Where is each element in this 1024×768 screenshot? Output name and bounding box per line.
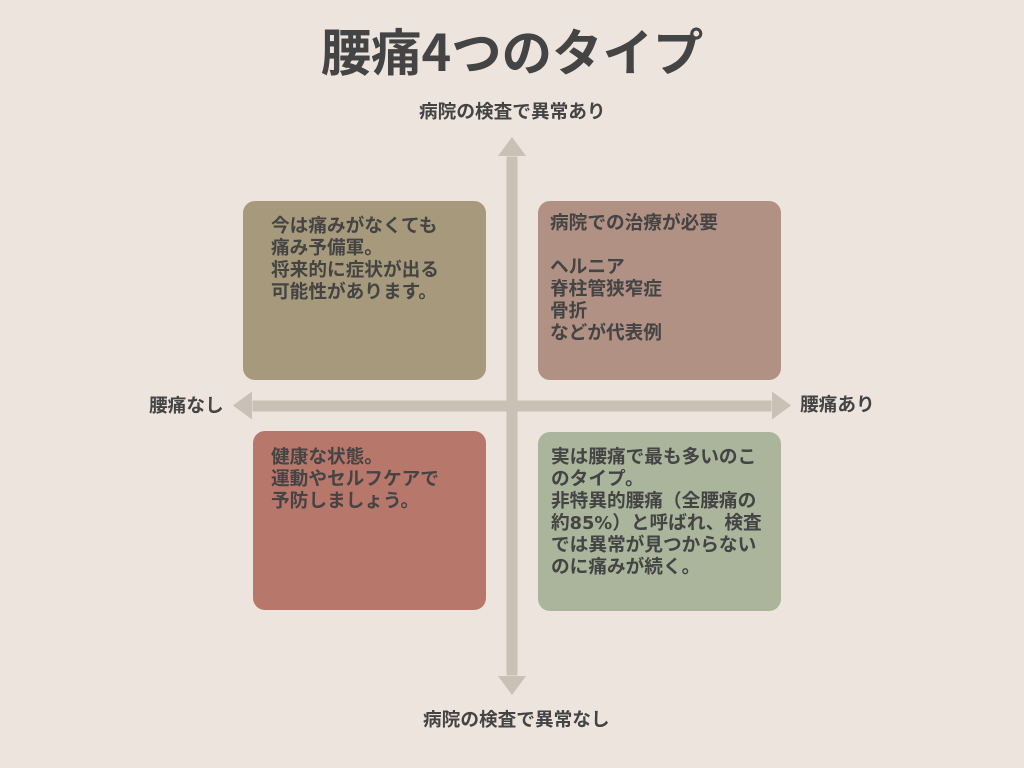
panel text: 健康な状態。 bbox=[271, 442, 383, 469]
panel text: 非特異的腰痛（全腰痛の bbox=[551, 486, 756, 513]
panel: pain, abnormal findings bbox=[538, 201, 781, 380]
panel text bbox=[550, 208, 718, 345]
horizontal axis arrow bbox=[233, 392, 791, 420]
axis label: bottom: 病院の検査で異常なし bbox=[423, 705, 610, 732]
panel text: 脊柱管狭窄症 bbox=[550, 274, 662, 301]
axis label: right: 腰痛あり bbox=[800, 390, 875, 417]
title: 腰痛4つのタイプ bbox=[321, 13, 703, 86]
panel text: 今は痛みがなくても bbox=[271, 211, 437, 238]
panel: no pain, abnormal findings bbox=[243, 201, 486, 380]
panel text: ヘルニア bbox=[550, 252, 625, 279]
panel text: のに痛みが続く。 bbox=[551, 552, 700, 579]
panel text: では異常が見つからない bbox=[551, 530, 756, 557]
panel text bbox=[271, 442, 439, 513]
panel text: 約85%）と呼ばれ、検査 bbox=[551, 508, 762, 535]
panel text: 痛み予備軍。 bbox=[271, 233, 383, 260]
panel text: 運動やセルフケアで bbox=[271, 464, 439, 491]
panel text: 骨折 bbox=[550, 296, 587, 323]
axis label: left: 腰痛なし bbox=[149, 391, 224, 418]
panel text: 予防しましょう。 bbox=[271, 486, 419, 513]
panel text: 可能性があります。 bbox=[271, 277, 437, 304]
panel text bbox=[271, 211, 439, 304]
panel text: などが代表例 bbox=[550, 318, 662, 345]
vertical axis arrow bbox=[498, 137, 526, 695]
panel text bbox=[551, 442, 762, 579]
panel text: 実は腰痛で最も多いのこ bbox=[551, 442, 756, 469]
panel: no pain, no findings bbox=[253, 431, 486, 610]
panel: pain, no findings bbox=[538, 432, 781, 611]
panel text: 将来的に症状が出る bbox=[271, 255, 439, 282]
axis label: top: 病院の検査で異常あり bbox=[419, 97, 606, 124]
panel text: のタイプ。 bbox=[551, 464, 644, 491]
panel text: 病院での治療が必要 bbox=[550, 208, 718, 235]
